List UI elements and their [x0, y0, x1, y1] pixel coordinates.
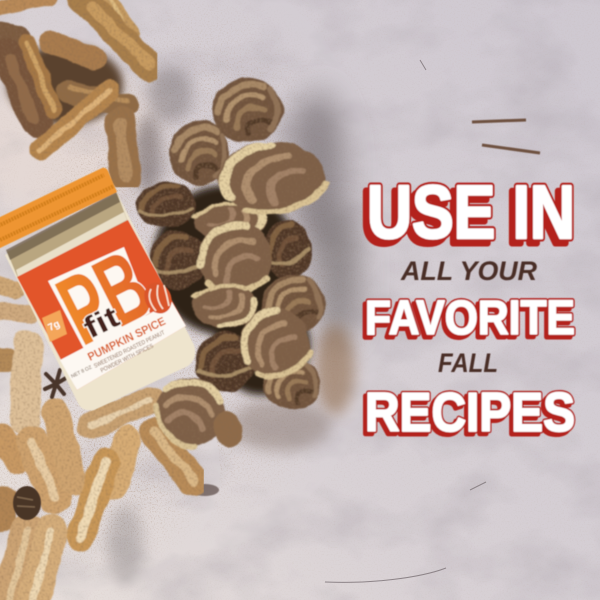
cookie: lower dark left — [150, 230, 206, 290]
cookie: lower right — [264, 360, 320, 410]
white label band — [60, 302, 186, 390]
headline: recipes: RECIPES — [365, 381, 575, 443]
cookie: centre — [194, 216, 276, 300]
script line: fall: FALL — [438, 348, 498, 378]
powder showing above label — [7, 193, 128, 278]
headline: favorite: FAVORITE — [362, 295, 572, 348]
pumpkin spice name: PUMPKIN SPICE — [86, 316, 168, 364]
cookie: sandwich left — [136, 182, 196, 228]
protein badge — [42, 310, 67, 342]
cookie: upper left — [160, 110, 240, 196]
cookie: sandwich bottom — [193, 284, 257, 328]
jar body — [5, 193, 195, 410]
product description: POWDER WITH SPICES — [100, 344, 155, 374]
shadows cast by the food — [107, 67, 360, 585]
headline: favorite: FAVORITE — [365, 292, 575, 345]
white logo backing — [48, 247, 150, 349]
product description — [93, 330, 169, 376]
orange lid — [0, 168, 117, 249]
headline: favorite: FAVORITE — [365, 292, 575, 345]
cookie: sandwich top — [188, 199, 272, 245]
cookie: right lower — [262, 275, 324, 335]
star anise and pine cone — [13, 370, 66, 520]
net weight: NET 8 OZ — [70, 365, 93, 380]
pumpkin icon — [139, 278, 177, 318]
churros: top left group — [0, 0, 150, 178]
cookie: large centre — [206, 134, 338, 222]
product jar — [0, 168, 195, 410]
cookie: right — [235, 302, 315, 384]
PB logo: PB — [41, 228, 167, 366]
swirled cookies — [136, 70, 338, 459]
product description: SWEETENED ROASTED PEANUT — [93, 330, 166, 370]
fit logo: fit — [79, 300, 125, 345]
churros: behind jar and lower left group — [0, 285, 194, 600]
protein badge: 7g — [46, 319, 62, 334]
cookie: top — [204, 70, 290, 150]
headline: recipes: RECIPES — [362, 384, 572, 446]
cookie: dark low — [195, 332, 255, 392]
headline: recipes: RECIPES — [365, 381, 575, 443]
dark gaps under food piles — [7, 45, 310, 395]
cookie: bottom — [143, 365, 237, 459]
script line: all your: ALL YOUR — [400, 256, 537, 286]
cookie: right of centre — [261, 215, 315, 285]
red-orange label — [17, 220, 186, 390]
